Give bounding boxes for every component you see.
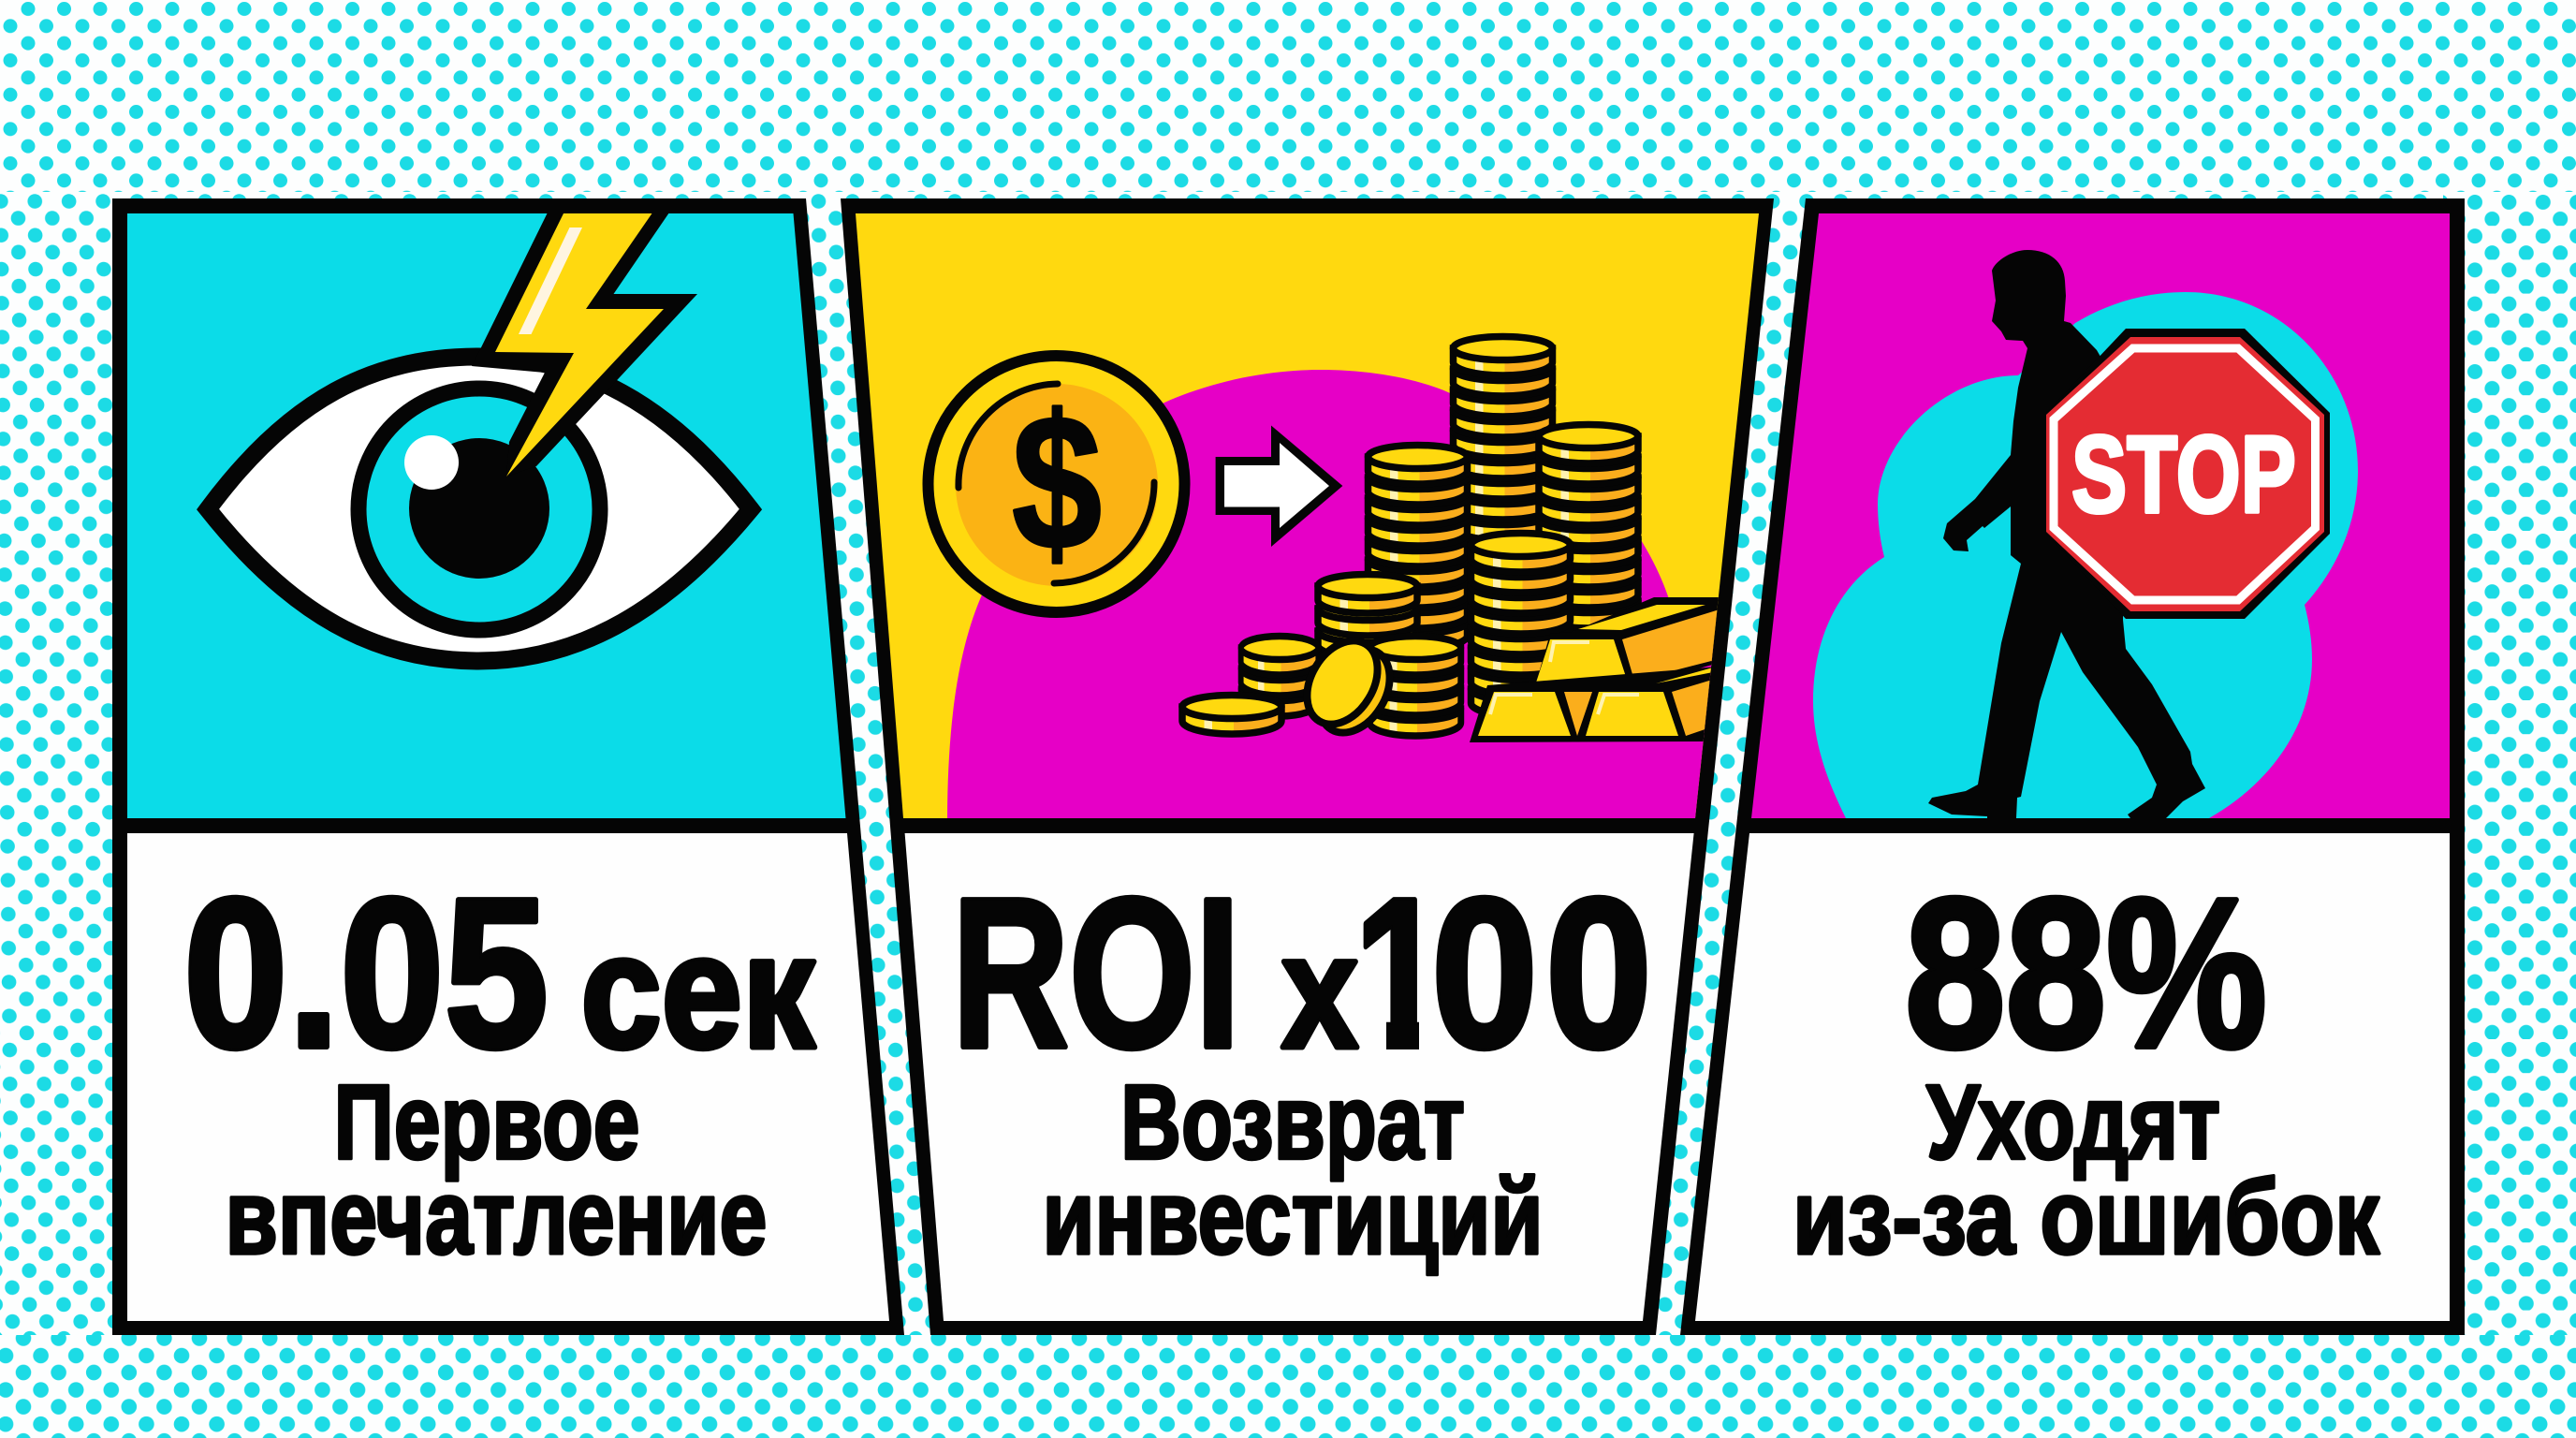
stat: 0.05 сек xyxy=(183,855,815,1093)
gold bars xyxy=(1470,597,1722,742)
stack: right xyxy=(1539,425,1638,628)
coin: single flat xyxy=(1182,695,1281,734)
panel: return on investment xyxy=(841,198,1774,1335)
stat: ROI x100: 0 xyxy=(1545,855,1652,1093)
icon: dollar coin: $ xyxy=(1012,375,1102,590)
label: Возврат инвестиций xyxy=(1043,1064,1543,1276)
stack: left centre xyxy=(1368,446,1468,649)
icon: stop sign xyxy=(2046,329,2330,619)
icon: eye xyxy=(208,357,751,661)
stack: small middle xyxy=(1318,575,1417,658)
label: Возврат инвестиций: Возврат xyxy=(1120,1064,1465,1181)
label: Первое впечатление: впечатление xyxy=(225,1158,768,1276)
icon: dollar coin xyxy=(929,356,1185,612)
label: Уходят из-за ошибок: из-за ошибок xyxy=(1793,1158,2379,1276)
stat: 0.05 сек: 0.05 xyxy=(183,855,549,1093)
stack: short left xyxy=(1241,637,1318,716)
teal backdrop shape xyxy=(1813,292,2358,818)
magenta backdrop shape xyxy=(947,370,1722,824)
stat: ROI x100: 0 xyxy=(1431,855,1538,1093)
stack: tall back xyxy=(1453,337,1552,561)
stat: ROI x100 xyxy=(952,855,1652,1093)
coin: leaning xyxy=(1303,638,1393,736)
stack: front centre xyxy=(1471,534,1571,716)
label: Уходят из-за ошибок: Уходят xyxy=(1926,1064,2220,1181)
stat: ROI x100: x xyxy=(1281,901,1358,1082)
icon: stop sign: STOP xyxy=(2071,413,2296,536)
label: Первое впечатление: Первое xyxy=(333,1064,640,1181)
label: Возврат инвестиций: инвестиций xyxy=(1043,1158,1543,1276)
stat: ROI x100: 1 xyxy=(1354,855,1445,1093)
panel: first impression xyxy=(112,198,904,1335)
stat: 88%: 88% xyxy=(1905,855,2267,1093)
stat: ROI x100: ROI xyxy=(952,855,1240,1093)
icon: coin stacks and gold bars xyxy=(1182,337,1722,745)
arrow xyxy=(1216,425,1342,547)
icon: lightning bolt xyxy=(472,213,697,477)
label: Первое впечатление xyxy=(225,1064,768,1276)
stat: 0.05 сек: сек xyxy=(580,901,815,1082)
stack: front low xyxy=(1369,637,1461,736)
panel: users leaving xyxy=(1680,198,2465,1335)
label: Уходят из-за ошибок xyxy=(1793,1064,2379,1276)
icon: walking man silhouette xyxy=(1928,250,2205,818)
